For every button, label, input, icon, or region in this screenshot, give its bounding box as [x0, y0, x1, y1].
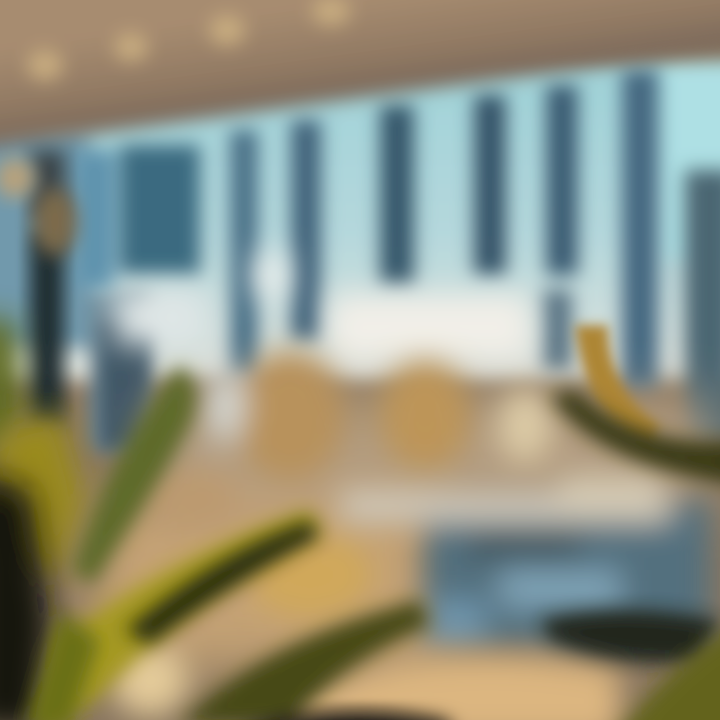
bright midsection band — [115, 255, 530, 360]
ceiling — [0, 0, 720, 150]
ceiling lights — [27, 0, 350, 80]
floor — [112, 644, 620, 720]
warm lower room — [90, 400, 710, 670]
golden furniture shapes — [140, 350, 553, 617]
dark pole and flowers on left — [0, 150, 77, 425]
lower reflective glass area — [340, 475, 710, 645]
plant leaves bottom left — [0, 320, 450, 720]
window wall background — [0, 60, 720, 450]
dark window columns — [75, 70, 720, 450]
plant leaves right — [540, 325, 720, 720]
